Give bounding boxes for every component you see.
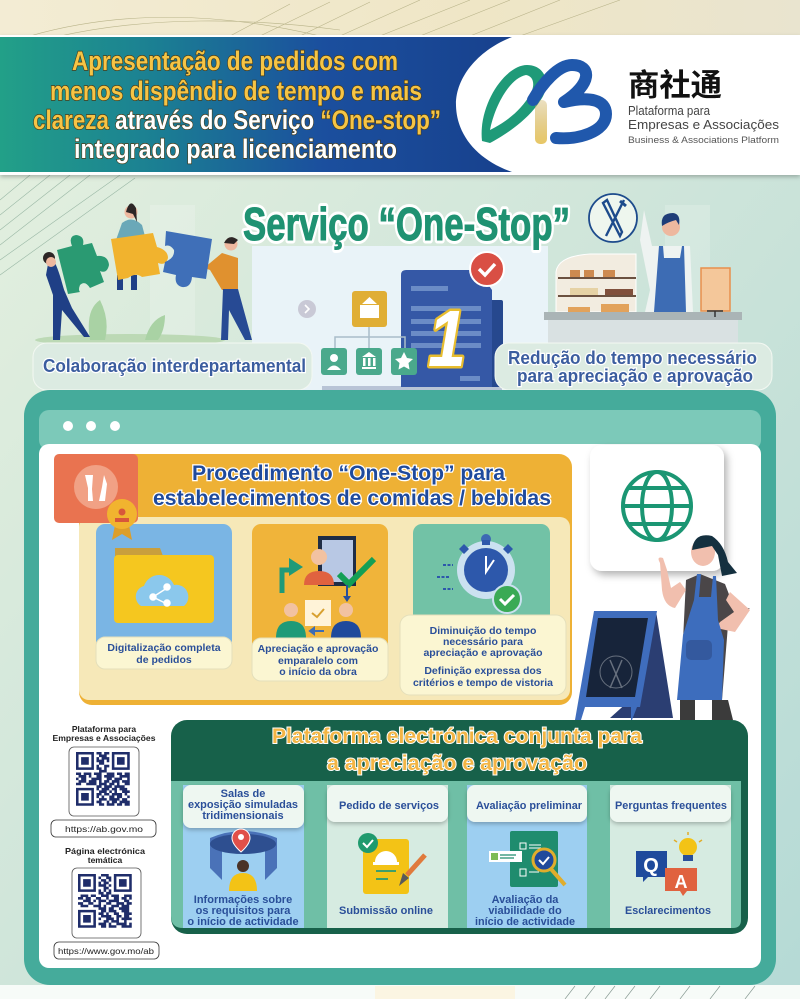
- panel label: time reduction: Redução do tempo necessário: [508, 348, 757, 368]
- main title: Serviço “One-Stop”: [243, 198, 570, 250]
- card: digitalisation: Digitalização completa: [107, 642, 221, 654]
- procedure heading: estabelecimentos de comidas / bebidas: [153, 487, 551, 510]
- banner title: menos dispêndio de tempo e mais: [50, 76, 422, 106]
- panel label: collaboration: Colaboração interdepartamental: [43, 356, 306, 376]
- logo text: Empresas e Associações: [628, 118, 779, 132]
- panel: one-stop procedure: [54, 454, 572, 705]
- card: timing: Diminuição do tempo: [430, 625, 536, 637]
- card: 3D showrooms: tridimensionais: [202, 810, 284, 822]
- person top: [116, 219, 146, 240]
- logo text: 商社通: [628, 68, 722, 103]
- card: preliminary assessment: viabilidade do: [488, 905, 562, 917]
- card: digitalisation: de pedidos: [136, 654, 192, 666]
- logo text: [628, 68, 779, 145]
- card: FAQ: A: [674, 872, 688, 892]
- centre one-stop panel: [252, 246, 548, 391]
- chevron button: [298, 300, 316, 318]
- card: timing: [400, 524, 566, 695]
- card: FAQ: Perguntas frequentes: [615, 800, 727, 812]
- QR 2 heading: [65, 846, 145, 865]
- window dots: [63, 421, 120, 431]
- logo text: Plataforma para: [628, 104, 710, 118]
- card: service request: Pedido de serviços: [339, 800, 439, 812]
- procedure heading: [153, 462, 551, 510]
- puzzle yellow: [111, 233, 168, 280]
- person right: [204, 253, 238, 290]
- bakery illustration: [544, 210, 742, 346]
- card: parallel approval: [252, 524, 388, 681]
- platform heading: a apreciação e aprovação: [327, 751, 587, 775]
- ribbon badge: [107, 499, 137, 540]
- icon: globe: [623, 472, 691, 540]
- card: timing: necessário para: [443, 636, 523, 648]
- card: parallel approval: Apreciação e aprovação: [258, 643, 378, 655]
- card: parallel approval: emparalelo com: [278, 655, 358, 667]
- card: timing: apreciação e aprovação: [423, 647, 543, 659]
- panel label: time reduction: para apreciação e aprovação: [517, 366, 753, 386]
- puzzle green: [57, 235, 109, 294]
- URL 2: [54, 942, 159, 959]
- card: parallel approval: o início da obra: [279, 666, 357, 678]
- card: preliminary assessment: Avaliação preliminar: [476, 800, 583, 812]
- panel label: time reduction: [495, 343, 772, 390]
- card: digitalisation: [96, 524, 232, 669]
- main title: Serviço “One-Stop”: [243, 198, 570, 250]
- QR 2 heading: Página electrónica: [65, 846, 145, 856]
- card: 3D showrooms: exposição simuladas: [188, 799, 298, 811]
- card: preliminary assessment: Avaliação da: [492, 894, 559, 906]
- card: timing: critérios e tempo de vistoria: [413, 677, 553, 689]
- number one: 1: [428, 294, 466, 383]
- banner title: [33, 46, 441, 164]
- woman illustration: [659, 535, 750, 720]
- QR code 2: [72, 868, 141, 938]
- globe card: [590, 445, 724, 571]
- banner title: integrado para licenciamento: [74, 134, 397, 164]
- chef: [640, 210, 693, 312]
- menu stand: [701, 268, 730, 311]
- card: service request: [327, 785, 448, 928]
- platform heading: Plataforma electrónica conjunta para: [272, 724, 643, 748]
- platform heading: [272, 724, 643, 775]
- panel label: collaboration: [33, 343, 312, 390]
- card: preliminary assessment: início de actividade: [475, 916, 575, 928]
- banner title: Apresentação de pedidos com: [72, 46, 398, 76]
- monitor frame: [24, 390, 776, 985]
- panel: joint e-platform: [171, 720, 748, 934]
- logo: [482, 65, 606, 144]
- card: FAQ: Q: [643, 855, 659, 877]
- person left: [46, 253, 90, 340]
- logo text: Business & Associations Platform: [628, 135, 779, 145]
- card: service request: Submissão online: [339, 905, 433, 917]
- card: 3D showrooms: [183, 785, 304, 928]
- QR 2 heading: temática: [88, 855, 123, 865]
- red square icon: [54, 454, 138, 523]
- puzzle blue: [163, 231, 212, 287]
- card: FAQ: Esclarecimentos: [625, 905, 711, 917]
- header banner: [0, 35, 800, 175]
- card: FAQ: [610, 785, 731, 928]
- card: 3D showrooms: Salas de: [221, 788, 265, 800]
- QR column: [51, 724, 159, 959]
- card: 3D showrooms: os requisitos para: [196, 905, 291, 917]
- org chart icons: [321, 291, 417, 375]
- QR 1 heading: Plataforma para: [72, 724, 136, 734]
- card: 3D showrooms: Informações sobre: [194, 894, 292, 906]
- document icon: [401, 252, 504, 387]
- banner title: clareza através do Serviço “One-stop”: [33, 105, 441, 135]
- card: preliminary assessment: [467, 785, 587, 928]
- QR code 1: [69, 747, 139, 816]
- QR 1 heading: Empresas e Associações: [52, 733, 156, 743]
- icon: cutlery: [589, 194, 637, 242]
- A-frame menu board: [575, 611, 673, 720]
- URL 2: https://www.gov.mo/ab: [58, 946, 154, 956]
- card: 3D showrooms: o início de actividade: [187, 916, 299, 928]
- URL 1: https://ab.gov.mo: [65, 824, 143, 834]
- QR 1 heading: [52, 724, 156, 743]
- teamwork illustration: [35, 203, 252, 346]
- procedure heading: Procedimento “One-Stop” para: [192, 462, 505, 485]
- card: timing: Definição expressa dos: [424, 665, 542, 677]
- URL 1: [51, 820, 156, 837]
